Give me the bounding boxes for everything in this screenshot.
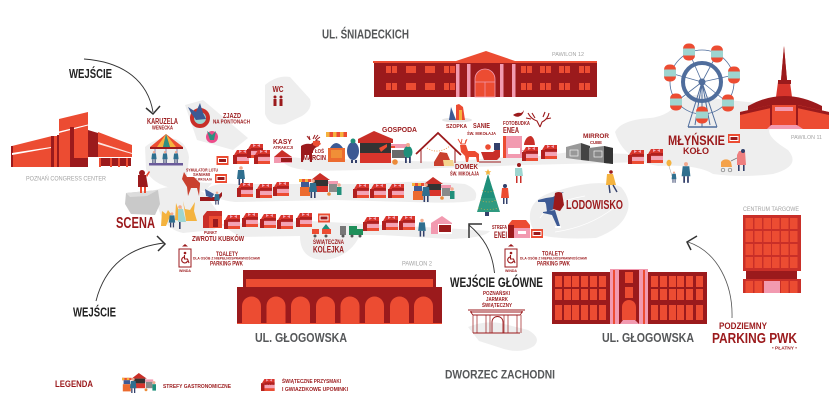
label: Fotobudka Enea: FOTOBUDKA [503,121,531,127]
building: Pawilon 2 [237,270,442,324]
label: toilets left: DLA OSÓB Z NIEPEŁNOSPRAWNOŚCIAMI [193,256,260,260]
label: WC [272,85,284,106]
legend text: treats and gifts [282,378,348,393]
label: Pawilon 2: PAWILON 2 [402,262,433,268]
label: Młyńskie koło [668,132,725,156]
heading: wejście lower: WEJŚCIE [73,304,116,320]
top row: kasy atrakcji [273,137,293,163]
label: Domek Św. Mikołaja: DOMEK [455,162,478,171]
icon: mirror cube [566,143,613,164]
label: Pawilon 11: PAWILON 11 [791,135,822,141]
label: Symulator lotu saniami: SANIAMI [193,172,211,178]
top row: kasy atrakcji: ATRAKCJI [273,145,293,150]
gastronomy zone: second row right [412,177,454,202]
label: Lodowisko: LODOWISKO [566,197,623,212]
label: Fotobudka Enea: ENEA [503,126,519,135]
label: Młyńskie koło: MŁYŃSKIE [668,132,725,148]
person with bag by tree [501,184,509,204]
label: kasa (ferris wheel) [728,134,740,143]
icon: party props [513,110,551,153]
stage with performer [125,170,160,215]
label: Pawilon 12: PAWILON 12 [552,52,584,58]
christmas tree [477,169,500,216]
label: Szopka: SZOPKA [446,124,468,130]
label: Karuzela wenecka: WENECKA [152,126,173,132]
label: Sanie Św. Mikołaja: ŚW. MIKOŁAJA [467,130,496,137]
label: kasa (top left) [216,156,228,165]
label: Scena: SCENA [116,215,155,232]
person near kiosks [237,166,245,185]
label: Centrum Targowe: CENTRUM TARGOWE [743,206,799,213]
arrow: top-left entrance [84,59,160,114]
label: Punkt zwrotu kubków: ZWROTU KUBKÓW [192,234,245,243]
icon: pontoon ride [188,103,218,143]
building: right hall [552,269,707,324]
building: Centrum Targowe [743,215,801,293]
label: toilets right: TOALETY [542,250,565,258]
building: Pawilon 12 [373,51,597,97]
label: winda right: WINDA [505,269,517,273]
building: Pawilon 11 [740,46,829,129]
label: Poznański Jarmark Świąteczny: ŚWIĄTECZNY [482,302,512,309]
label: Poznański Jarmark Świąteczny: JARMARK [486,297,508,303]
icon: christmas train [312,224,363,238]
label: Karuzela wenecka [147,117,178,132]
label: Punkt zwrotu kubków: PUNKT [204,230,217,236]
legend text: treats and gifts: ŚWIĄTECZNE PRZYSMAKI [282,378,341,385]
arrow: parking [687,236,732,318]
label: Młyńskie koło: KOŁO [683,146,709,156]
label: toilets right: PARKING PWK [537,260,570,268]
label: underground parking: PODZIEMNY [719,321,768,332]
label: Punkt zwrotu kubków [192,230,245,243]
label: Poznań Congress Center: POZNAŃ CONGRESS CENTER [26,174,106,182]
kiosk row: lower centre [363,216,415,231]
mirror cube label: CUBE [590,140,603,146]
label: toilets left: TOALETY [216,251,239,258]
nativity: szopka [442,104,472,122]
label: Sanie Św. Mikołaja: SANIE [473,121,490,130]
gastronomy zone: second row [299,173,342,198]
icon: lift right [505,244,517,267]
label: toilets left: PARKING PWK [210,260,243,268]
label: Symulator lotu saniami: SYMULATOR LOTU [186,168,218,174]
person with gift [418,219,426,237]
icon: main entrance gate [468,310,525,333]
label: winda left: WINDA [179,269,191,273]
label: Symulator lotu saniami: ŚW. MIKOŁAJA [192,176,212,182]
person in green [347,138,359,163]
label: Łoś Marcin: MARCIN [303,153,326,162]
legend title: LEGENDA [55,379,93,390]
building: Poznań Congress Center [11,112,132,167]
heading: main entrance: WEJŚCIE GŁÓWNE [450,275,543,290]
label: kasa (symulator) [215,174,227,183]
label: underground parking: • PŁATNY • [772,346,797,350]
mirror cube label [583,133,609,146]
family with balloon [666,160,690,183]
label: Gospoda: GOSPODA [382,125,418,134]
skater in yellow [606,170,617,193]
icon: carousel [149,134,183,166]
person with pram [721,149,746,172]
kiosk pair: far right [628,149,663,164]
heading: wejście top: WEJŚCIE [69,66,112,81]
photo booth [503,136,522,158]
kiosk group: top row left [233,144,270,164]
label: Łoś Marcin [303,148,326,162]
audience dancing [161,201,197,229]
label: Poznański Jarmark Świąteczny: POZNAŃSKI [483,289,510,297]
icon: Santa's cottage [416,133,461,166]
label: Sanie Św. Mikołaja [467,121,496,137]
label: Domek Św. Mikołaja [450,162,479,178]
label: Strefa Enei [492,225,507,240]
legend text: treats and gifts: I GWIAZDKOWE UPOMINKI [282,387,348,393]
label: Łoś Marcin: ŁOŚ [315,148,325,155]
big gastronomy pavilion: gospoda [358,131,412,165]
kiosk row: second row left [237,182,289,198]
label: Domek Św. Mikołaja: ŚW. MIKOŁAJA [450,170,479,178]
street label: ul. Głogowska left: UL. GŁOGOWSKA [255,331,347,345]
label: Świąteczna kolejka: KOLEJKA [313,244,344,254]
label: WC: WC [272,85,284,94]
kiosk pair: top row right [522,145,557,161]
kiosk row: cup return [203,211,312,229]
label: Strefa Enei: ENEI [494,230,507,240]
label: Zjazd na pontonach: NA PONTONACH [213,120,250,126]
label: kasa (Enea) [531,229,543,238]
mirror cube label: MIRROR [583,133,609,140]
legend icon: stall [261,379,275,391]
icon: reindeer and sleigh [458,139,501,162]
label: Świąteczna kolejka: ŚWIĄTECZNA [313,239,345,246]
label: underground parking [712,321,797,350]
label: toilets left [193,251,260,268]
legend [55,373,348,393]
street label: Dworzec Zachodni: DWORZEC ZACHODNI [445,368,555,382]
label: Zjazd na pontonach: ZJAZD [223,111,241,120]
kiosk: kasa pink [431,216,452,234]
label: Strefa Enei: STREFA [492,225,507,231]
icon: moose [301,135,321,162]
label: Fotobudka Enea [503,121,531,135]
label: underground parking: PARKING PWK [712,330,797,347]
ferris wheel [664,44,740,127]
icon: lift left [179,244,191,267]
label: Zjazd na pontonach [213,111,250,126]
kiosk: Enea zone [508,220,530,238]
legend text: gastronomy: STREFY GASTRONOMICZNE [163,384,231,390]
food cart [326,132,347,162]
ice rink [530,183,629,238]
label: Karuzela wenecka: KARUZELA [147,117,178,126]
kiosk row: second row centre [353,184,404,198]
top row: kasy atrakcji: KASY [273,137,292,146]
person with hood [515,163,523,183]
street label: ul. Głogowska right: UL. GŁOGOWSKA [602,331,694,345]
arrow: main entrance [469,224,494,273]
label: Świąteczna kolejka [313,239,345,254]
label: kasa (lower row) [318,214,330,222]
arrow: lower-left entrance [96,236,165,301]
label: Symulator lotu saniami [186,168,218,182]
label: toilets right [520,250,587,268]
icon: reindeer and sleigh simulator [182,172,222,205]
legend icon: gastronomy [122,373,156,393]
background walkway areas [145,77,793,351]
label: toilets right: DLA OSÓB Z NIEPEŁNOSPRAWNOŚCIAMI [520,256,587,260]
title street: ul. Śniadeckich: UL. ŚNIADECKICH [322,26,409,42]
label: Poznański Jarmark Świąteczny [482,289,512,309]
